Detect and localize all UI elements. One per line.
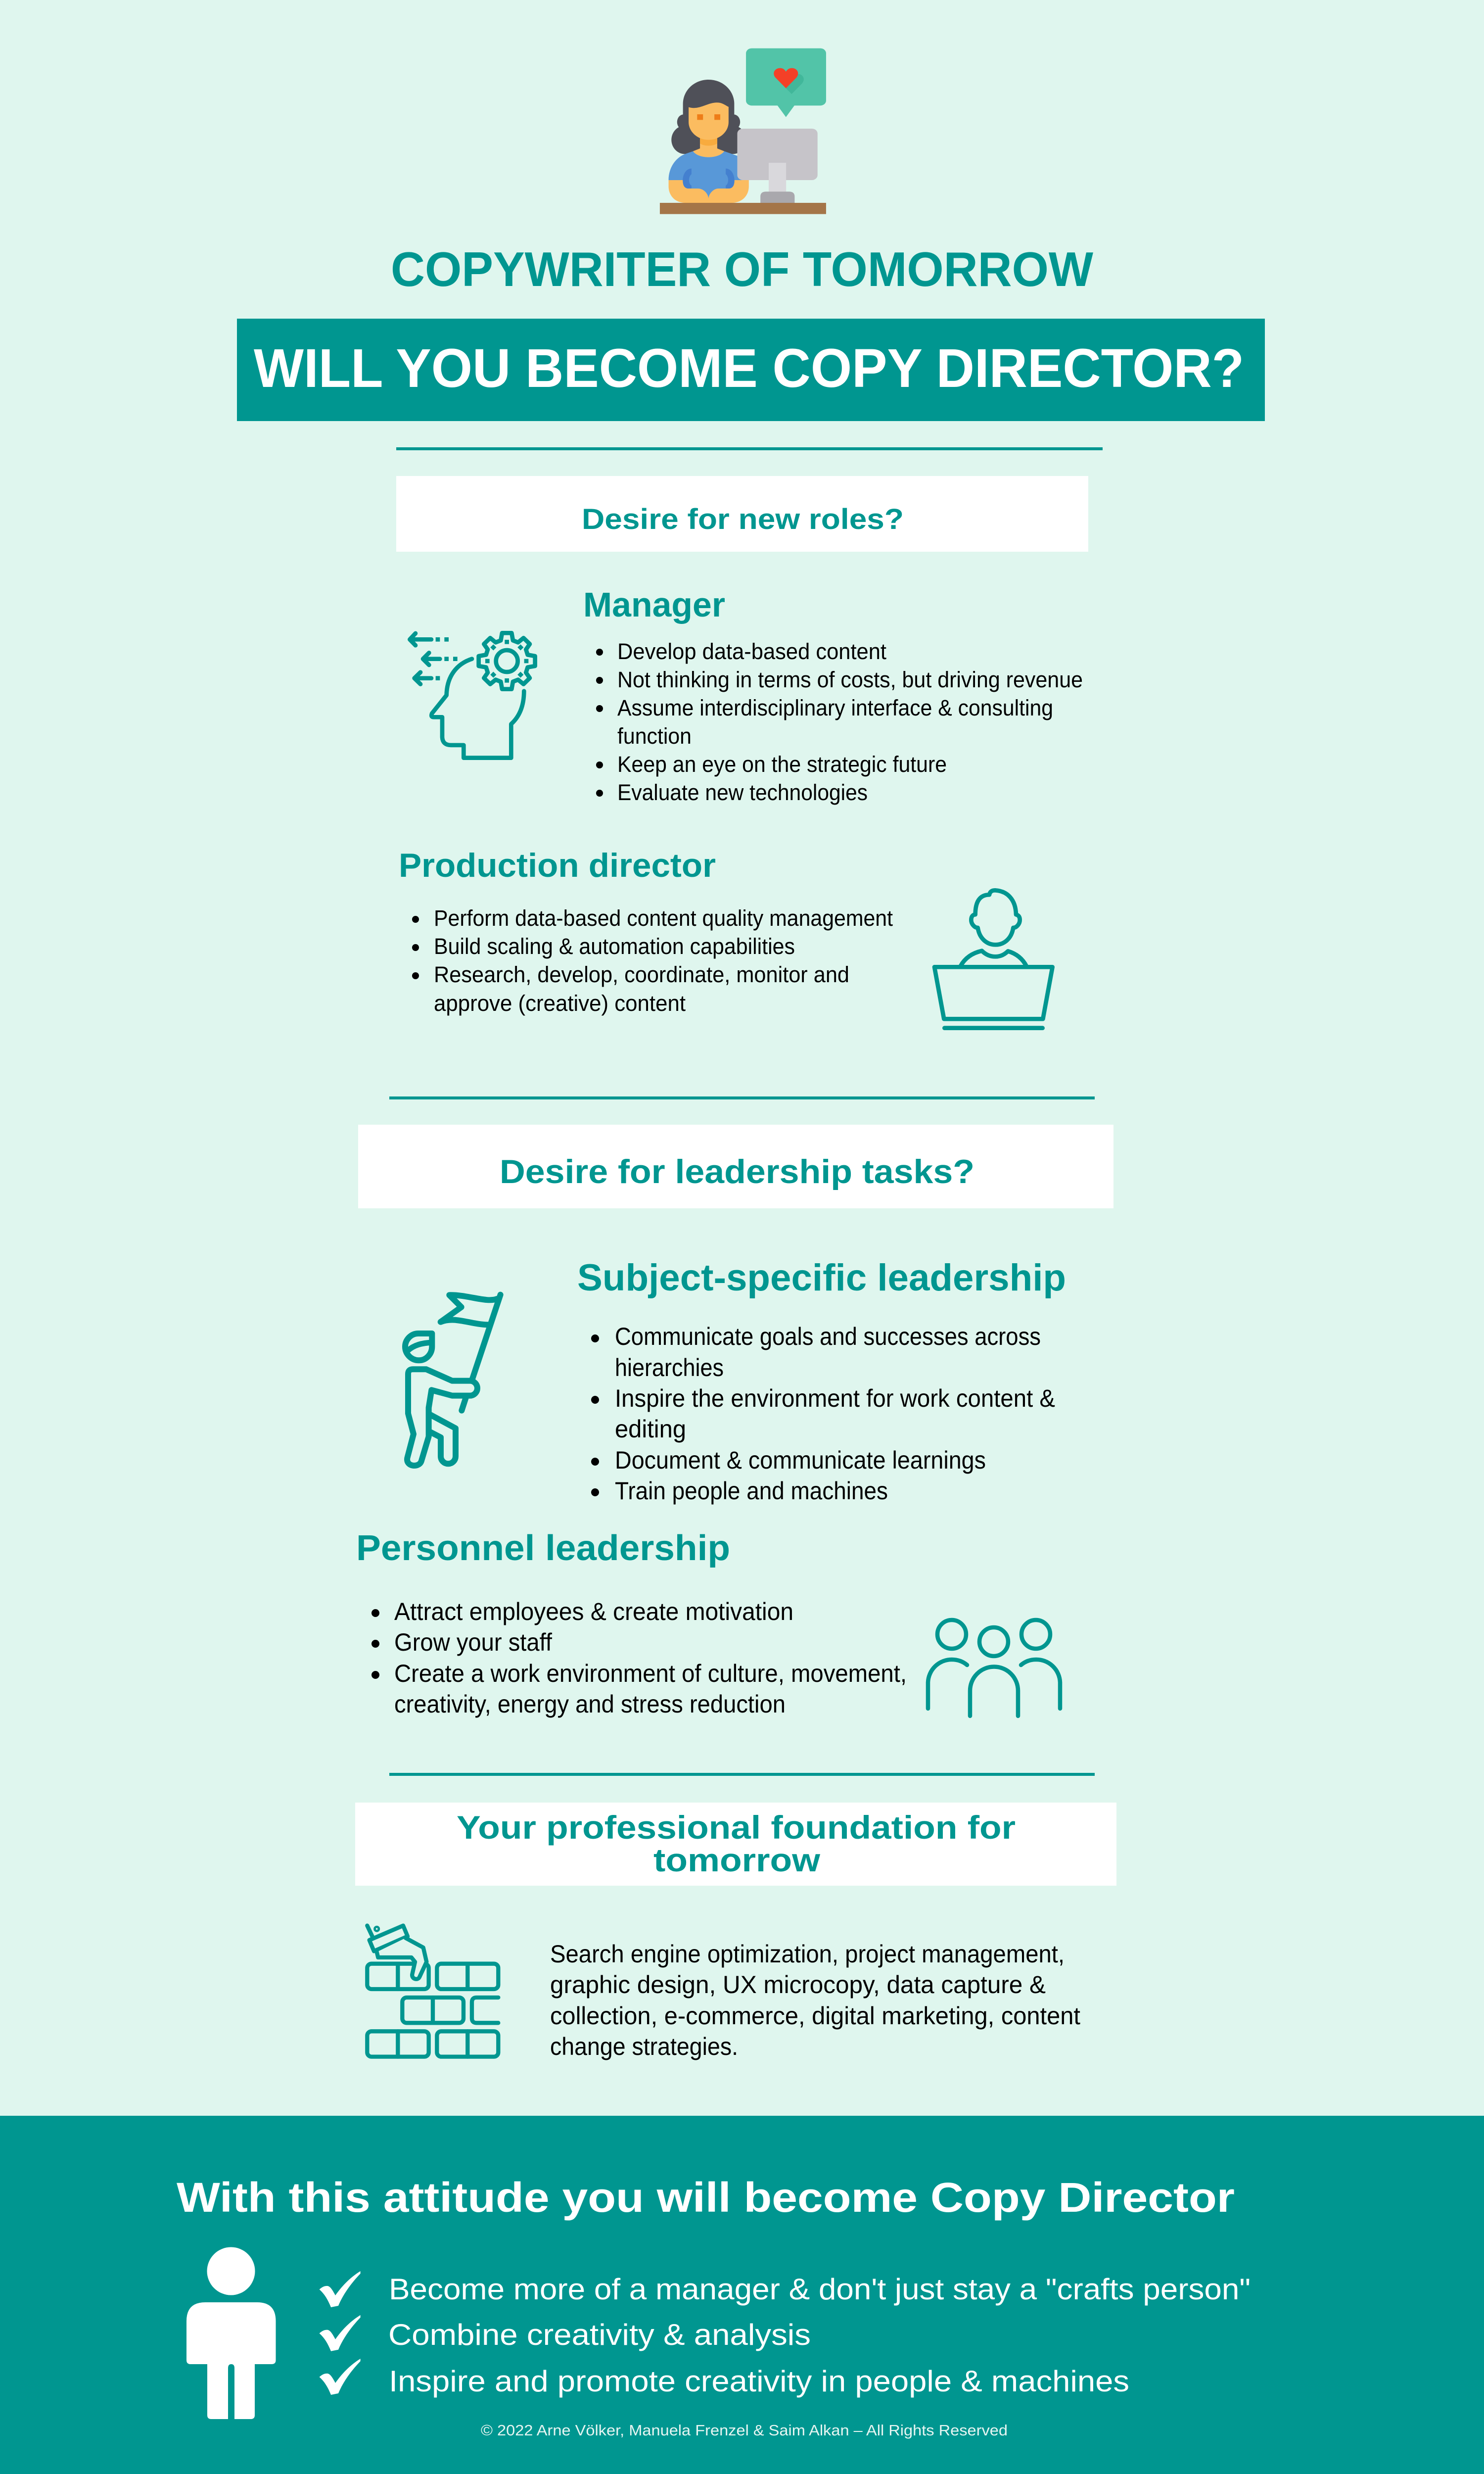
bullet list: personnel leadership: Grow your staff [394, 1628, 552, 1656]
text block: foundation skills: collection, e-commerce, digital marketing, content [550, 2002, 1080, 2030]
heading: production director: Production director [399, 847, 716, 884]
bullet list: manager [596, 639, 1083, 805]
bullet list: manager: Not thinking in terms of costs, but driving revenue [617, 667, 1083, 692]
heading: subject-specific leadership: Subject-specific leadership [577, 1257, 1066, 1299]
title: COPYWRITER OF TOMORROW [391, 242, 1093, 296]
heading: manager: Manager [583, 585, 725, 624]
bullet list: personnel leadership: Attract employees & create motivation [394, 1598, 793, 1625]
copyright: © 2022 Arne Völker, Manuela Frenzel & Saim Alkan – All Rights Reserved [481, 2422, 1008, 2439]
section heading: professional foundation: tomorrow [653, 1842, 821, 1878]
section heading: desire for leadership tasks [358, 1125, 1113, 1208]
bullet list: manager: Evaluate new technologies [617, 780, 868, 805]
checklist text: Become more of a manager & don't just stay a "crafts person" [389, 2273, 1251, 2306]
bullet list: manager: Keep an eye on the strategic future [617, 752, 947, 777]
heading: personnel leadership: Personnel leadership [356, 1528, 730, 1568]
panel: professional foundation [355, 1803, 1116, 2060]
bullet list: personnel leadership [371, 1598, 907, 1718]
icons: check marks [320, 2271, 361, 2395]
checklist text: Combine creativity & analysis [388, 2318, 811, 2351]
icon: group of three people [928, 1620, 1060, 1716]
text block: foundation skills [550, 1940, 1080, 2060]
banner: main question [237, 319, 1265, 421]
text block: foundation skills: change strategies. [550, 2033, 738, 2060]
panel: footer attitude [0, 2116, 1484, 2474]
icon: person behind laptop [934, 890, 1053, 1028]
bullet list: production director [412, 905, 893, 1016]
bullet list: manager: Assume interdisciplinary interface & consulting [617, 695, 1053, 720]
bullet list: production director: approve (creative) content [434, 991, 686, 1016]
bullet list: subject-specific leadership: editing [615, 1415, 686, 1443]
bullet list: production director: Research, develop, coordinate, monitor and [434, 962, 849, 987]
bullet list: subject-specific leadership [591, 1323, 1055, 1505]
banner: main question: WILL YOU BECOME COPY DIRECTOR? [254, 338, 1244, 399]
section heading: professional foundation [355, 1803, 1116, 1886]
bullet list: manager: Develop data-based content [617, 639, 886, 664]
illustration: copywriter at desk with computer and heart speech bubble [660, 48, 826, 214]
text block: foundation skills: Search engine optimization, project management, [550, 1940, 1065, 1968]
bullet list: subject-specific leadership: Inspire the environment for work content & [615, 1384, 1055, 1412]
icon: person silhouette [186, 2247, 276, 2419]
bullet list: personnel leadership: creativity, energy and stress reduction [394, 1690, 786, 1718]
icon: person holding flag [405, 1295, 501, 1466]
icon: head with gear and arrows [410, 633, 535, 758]
bullet list: subject-specific leadership: Train people and machines [615, 1477, 888, 1505]
icon: trowel and brick wall [367, 1926, 498, 2057]
section heading: professional foundation: Your professional foundation for [457, 1809, 1016, 1846]
bullet list: subject-specific leadership: Document & communicate learnings [615, 1446, 986, 1474]
section heading: desire for new roles [396, 476, 1088, 552]
bullet list: production director: Perform data-based content quality management [434, 905, 893, 931]
section heading: desire for new roles: Desire for new roles? [582, 503, 904, 535]
footer heading: With this attitude you will become Copy Director [177, 2174, 1235, 2221]
bullet list: manager: function [617, 723, 692, 749]
bullet list: subject-specific leadership: Communicate goals and successes across [615, 1323, 1041, 1350]
text block: foundation skills: graphic design, UX microcopy, data capture & [550, 1971, 1046, 1998]
panel: desire for new roles [396, 476, 1088, 1028]
bullet list: personnel leadership: Create a work environment of culture, movement, [394, 1660, 907, 1687]
bullet list: subject-specific leadership: hierarchies [615, 1354, 724, 1381]
checklist text [388, 2273, 1251, 2398]
checklist text: Inspire and promote creativity in people & machines [389, 2365, 1129, 2398]
panel: desire for leadership tasks [356, 1125, 1113, 1718]
bullet list: production director: Build scaling & automation capabilities [434, 934, 795, 959]
section heading: desire for leadership tasks: Desire for leadership tasks? [500, 1153, 974, 1190]
